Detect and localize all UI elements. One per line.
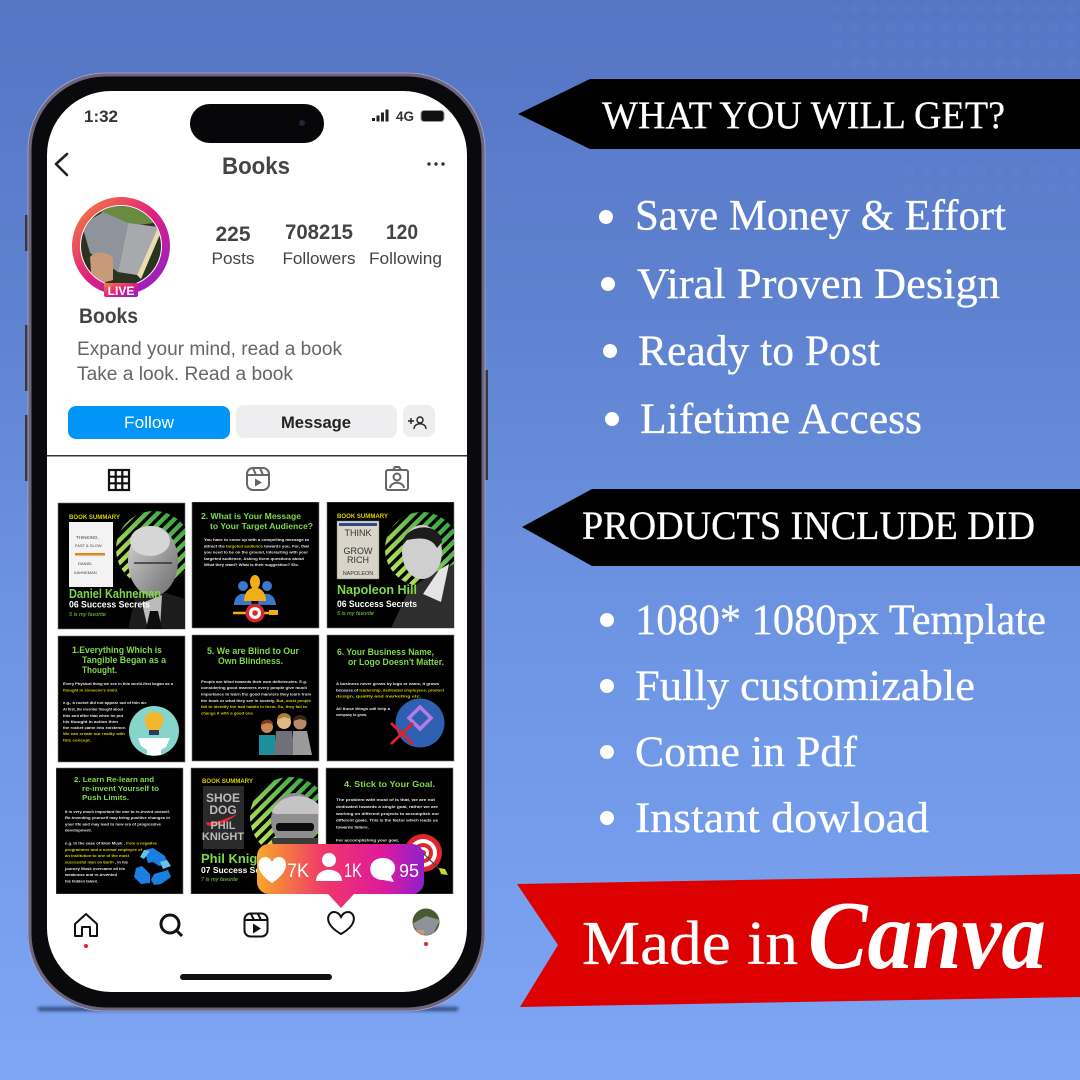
post: Phil Knight: PHIL [210, 820, 236, 832]
post: Napoleon Hill: NAPOLEON [343, 571, 373, 577]
profile buttons: Message [281, 414, 351, 432]
post: Daniel Kahneman [58, 503, 192, 629]
post: tangible thought: Tangible Began as a [82, 655, 167, 665]
post: blindness: the book or what they see in society. But, most people [201, 699, 311, 703]
profile bio: Books [79, 305, 138, 328]
banner: made in canva: Made in [582, 910, 798, 978]
icon: light bulb [129, 706, 179, 756]
banner: what you will get: WHAT YOU WILL GET? [602, 94, 1005, 137]
phone screen [47, 91, 467, 992]
profile stats: Posts [212, 249, 254, 268]
post: stick to goal: dedicated towards a single goal, rather we are [336, 805, 438, 809]
profile stats: 708215 [285, 221, 353, 244]
post: Napoleon Hill: THINK [344, 528, 372, 538]
post: re-learn: successful man on Earth , in his [65, 860, 128, 864]
post: tangible thought: thought in someone's mind. [63, 688, 118, 692]
post: message [192, 502, 319, 628]
icon: crossed logo [391, 698, 444, 748]
post: business name: or Logo Doesn't Matter. [348, 657, 444, 667]
post: Phil Knight: SHOE [206, 791, 240, 805]
post: re-learn: development. [65, 828, 92, 832]
list: products include [600, 597, 1046, 842]
halftone dots [830, 0, 1080, 196]
post: re-learn: Push Limits. [82, 793, 129, 802]
item: pdf: Come in Pdf [635, 729, 858, 776]
post: Phil Knight: DOG [209, 803, 237, 817]
banner: made in canva: Canva [808, 882, 1046, 990]
post: Daniel Kahneman: 5 is my favorite [69, 612, 106, 618]
profile stats [212, 221, 442, 268]
icon: heart [328, 912, 354, 934]
icon: three friends [259, 713, 312, 755]
profile bio: Expand your mind, read a book [77, 339, 342, 360]
icon: tagged tab [386, 467, 408, 490]
post: re-learn: your life and may lead to new era of progressive [65, 822, 161, 826]
post: re-learn: weakness and re-invented [64, 873, 117, 877]
banner: what you will get [518, 79, 1080, 149]
post: Daniel Kahneman: THINKING, [76, 535, 99, 540]
phone mockup [25, 73, 488, 1011]
post: blindness: People are blind towards their own deficiencies. E.g. [201, 680, 307, 684]
profile bio: Take a look. Read a book [77, 364, 293, 385]
post: stick to goal: The problem with most of is that, we are not [336, 798, 436, 802]
icon: reels [244, 914, 268, 936]
post: blindness: 5. We are Blind to Our [207, 646, 299, 656]
post: blindness: considering good manners every people give much [201, 686, 307, 690]
profile header [56, 153, 445, 180]
post: tangible thought: e.g., a rocket did not appear out of thin air. [63, 701, 147, 705]
post: message: to Your Target Audience? [210, 521, 313, 531]
post: Napoleon Hill: Napoleon Hill [337, 582, 417, 597]
post: re-learn: It is very much important for one to re-invent oneself. [65, 810, 170, 814]
post: Daniel Kahneman: 06 Success Secrets [69, 600, 150, 610]
icon: profile thumbnail [412, 908, 440, 936]
post: Napoleon Hill: 5 is my favorite [337, 611, 374, 617]
banner: products include: PRODUCTS INCLUDE DID [582, 503, 1035, 548]
post: blindness: Own Blindness. [218, 656, 283, 666]
list: what you will get [599, 192, 1006, 443]
phone shadow [38, 1007, 458, 1011]
item: save money: Save Money & Effort [635, 192, 1006, 240]
post: re-learn: journey Musk overcame all his [64, 867, 125, 871]
post: tangible thought: Thought. [82, 665, 117, 675]
post: business name: because of leadership, dedicated employees, product [336, 688, 445, 692]
profile buttons [68, 405, 435, 439]
icon: grid tab [109, 470, 129, 490]
post: blindness: fail to identify the bad habits in them. So, they fail to [201, 705, 307, 709]
side buttons [25, 215, 488, 481]
status bar [84, 104, 444, 143]
item: ready to post: Ready to Post [638, 328, 880, 375]
post: re-learn: Re-inventing yourself may bring positive changes in [65, 816, 170, 820]
post: Napoleon Hill: RICH [347, 555, 369, 565]
icon: search [161, 915, 182, 936]
post: message: targeted audience. Asking them questions about [204, 557, 305, 561]
post: Phil Knight: BOOK SUMMARY [202, 779, 253, 785]
post: tangible thought: his thought in action then [63, 720, 118, 724]
post: Phil Knight [191, 768, 330, 894]
post: Daniel Kahneman: FAST & SLOW [75, 543, 102, 548]
icon: home [75, 914, 97, 936]
signal [372, 110, 388, 122]
profile stats: Followers [282, 249, 356, 268]
profile avatar with live ring [76, 201, 166, 298]
post: stick to goal: working on different projects to accomplish our [335, 812, 440, 816]
item: customizable: Fully customizable [635, 663, 975, 710]
post: re-learn: re-invent Yourself to [82, 784, 159, 793]
home indicator [180, 974, 332, 980]
icon: heart count [258, 857, 309, 883]
post: business name: company to grow. [336, 713, 367, 717]
live badge: LIVE [108, 284, 134, 298]
post: business name: A business never grows by logo or name, it grows [336, 682, 439, 686]
post: message: attract the targeted audience towards you. For, that [204, 544, 310, 548]
icon: bullseye target [404, 834, 448, 875]
banner: made in canva [517, 874, 1080, 1007]
status bar: 4G [396, 109, 414, 124]
post: tangible thought: 1.Everything Which is [72, 645, 162, 655]
item: lifetime access: Lifetime Access [640, 396, 922, 443]
post: business name: All these things will help a [336, 707, 390, 711]
profile stats: 225 [216, 223, 251, 246]
dynamic island [190, 104, 324, 143]
profile buttons: Follow [124, 414, 174, 432]
post: blindness: change it with a good one. [201, 712, 254, 716]
banner: products include [522, 489, 1080, 566]
post: Phil Knight: Phil Knight [201, 851, 270, 866]
post: tangible thought: the rocket came into existence. [63, 726, 126, 730]
icon: reels tab [247, 468, 269, 490]
post: re-learn: an institution to one of the most [65, 854, 130, 858]
post: tangible thought [58, 636, 185, 762]
post: Napoleon Hill: BOOK SUMMARY [337, 514, 388, 520]
red dots [84, 942, 428, 948]
post: tangible thought: this concept. [63, 738, 91, 742]
post: tangible thought: this and after that when he put [63, 714, 124, 718]
profile header: Books [222, 153, 290, 180]
post: Daniel Kahneman: KAHNEMAN [74, 570, 97, 575]
icon: audience target [233, 575, 278, 622]
post: Napoleon Hill: 06 Success Secrets [337, 599, 417, 609]
item: template size: 1080* 1080px Template [635, 597, 1046, 644]
post: stick to goal: towards failure. [336, 826, 369, 830]
post: tangible thought: At first, the inventor thought about [63, 708, 124, 712]
status bar: 1:32 [84, 108, 118, 126]
post: stick to goal: 4. Stick to Your Goal. [344, 779, 435, 789]
post: stick to goal: different goals. This is the factor which leads us [336, 818, 438, 822]
icon: comments count: 95 [399, 861, 419, 881]
post: Daniel Kahneman: DANIEL [78, 561, 93, 566]
post: Phil Knight: 7 is my favorite [201, 877, 238, 883]
post: stick to goal [326, 768, 453, 894]
post: Phil Knight: KNIGHT [202, 831, 244, 843]
profile bio [77, 305, 342, 385]
post: re-learn: his hidden talent. [65, 880, 98, 884]
icon: heart count: 7K [287, 861, 309, 882]
post grid [56, 502, 459, 894]
phone body [28, 73, 485, 1011]
post: business name: design, quality and marketing etc. [336, 694, 421, 698]
post: re-learn: programmer and a normal employee of [65, 848, 143, 852]
post: message: you need to be on the ground, interacting with your [204, 551, 309, 555]
post: Daniel Kahneman: Daniel Kahneman [69, 587, 161, 601]
post: tangible thought: We can create our reality with [63, 732, 125, 736]
post: Napoleon Hill [327, 502, 459, 628]
battery [421, 110, 444, 122]
post: blindness: importance to learn the good manners they learn from [201, 692, 311, 696]
icon: followers count [316, 853, 362, 882]
post: Napoleon Hill: GROW [344, 546, 373, 556]
post: message: 2. What is Your Message [201, 511, 301, 521]
divider [47, 455, 467, 456]
item: download: Instant dowload [635, 795, 929, 842]
post: message: You have to come up with a compelling message to [204, 538, 309, 542]
item: viral design: Viral Proven Design [637, 261, 1000, 308]
post: tangible thought: Every Physical thing we see in this world-first began as a [63, 682, 173, 686]
icon: followers count: 1K [344, 861, 362, 882]
post: Phil Knight: 07 Success Secrets [201, 865, 281, 875]
post: stick to goal: For accomplishing your goal, [336, 838, 399, 842]
profile stats: Following [369, 249, 442, 268]
post: re-learn [56, 768, 183, 894]
post: re-learn: 2. Learn Re-learn and [74, 775, 154, 784]
post: Daniel Kahneman: BOOK SUMMARY [69, 515, 120, 521]
profile stats: 120 [386, 221, 418, 244]
icon: comments count [370, 858, 419, 882]
post: re-learn: e.g. in the case of Elon Musk , from a negative [65, 842, 157, 846]
post: message: What they want? What is their suggestion? Etc. [204, 563, 299, 567]
notification bubble [257, 844, 424, 908]
icon: recycle arrows [134, 848, 171, 885]
profile tabs [109, 467, 408, 490]
post: business name: 6. Your Business Name, [337, 647, 434, 657]
post: business name [327, 635, 454, 761]
bottom navigation [75, 908, 440, 980]
post: blindness [192, 635, 319, 761]
